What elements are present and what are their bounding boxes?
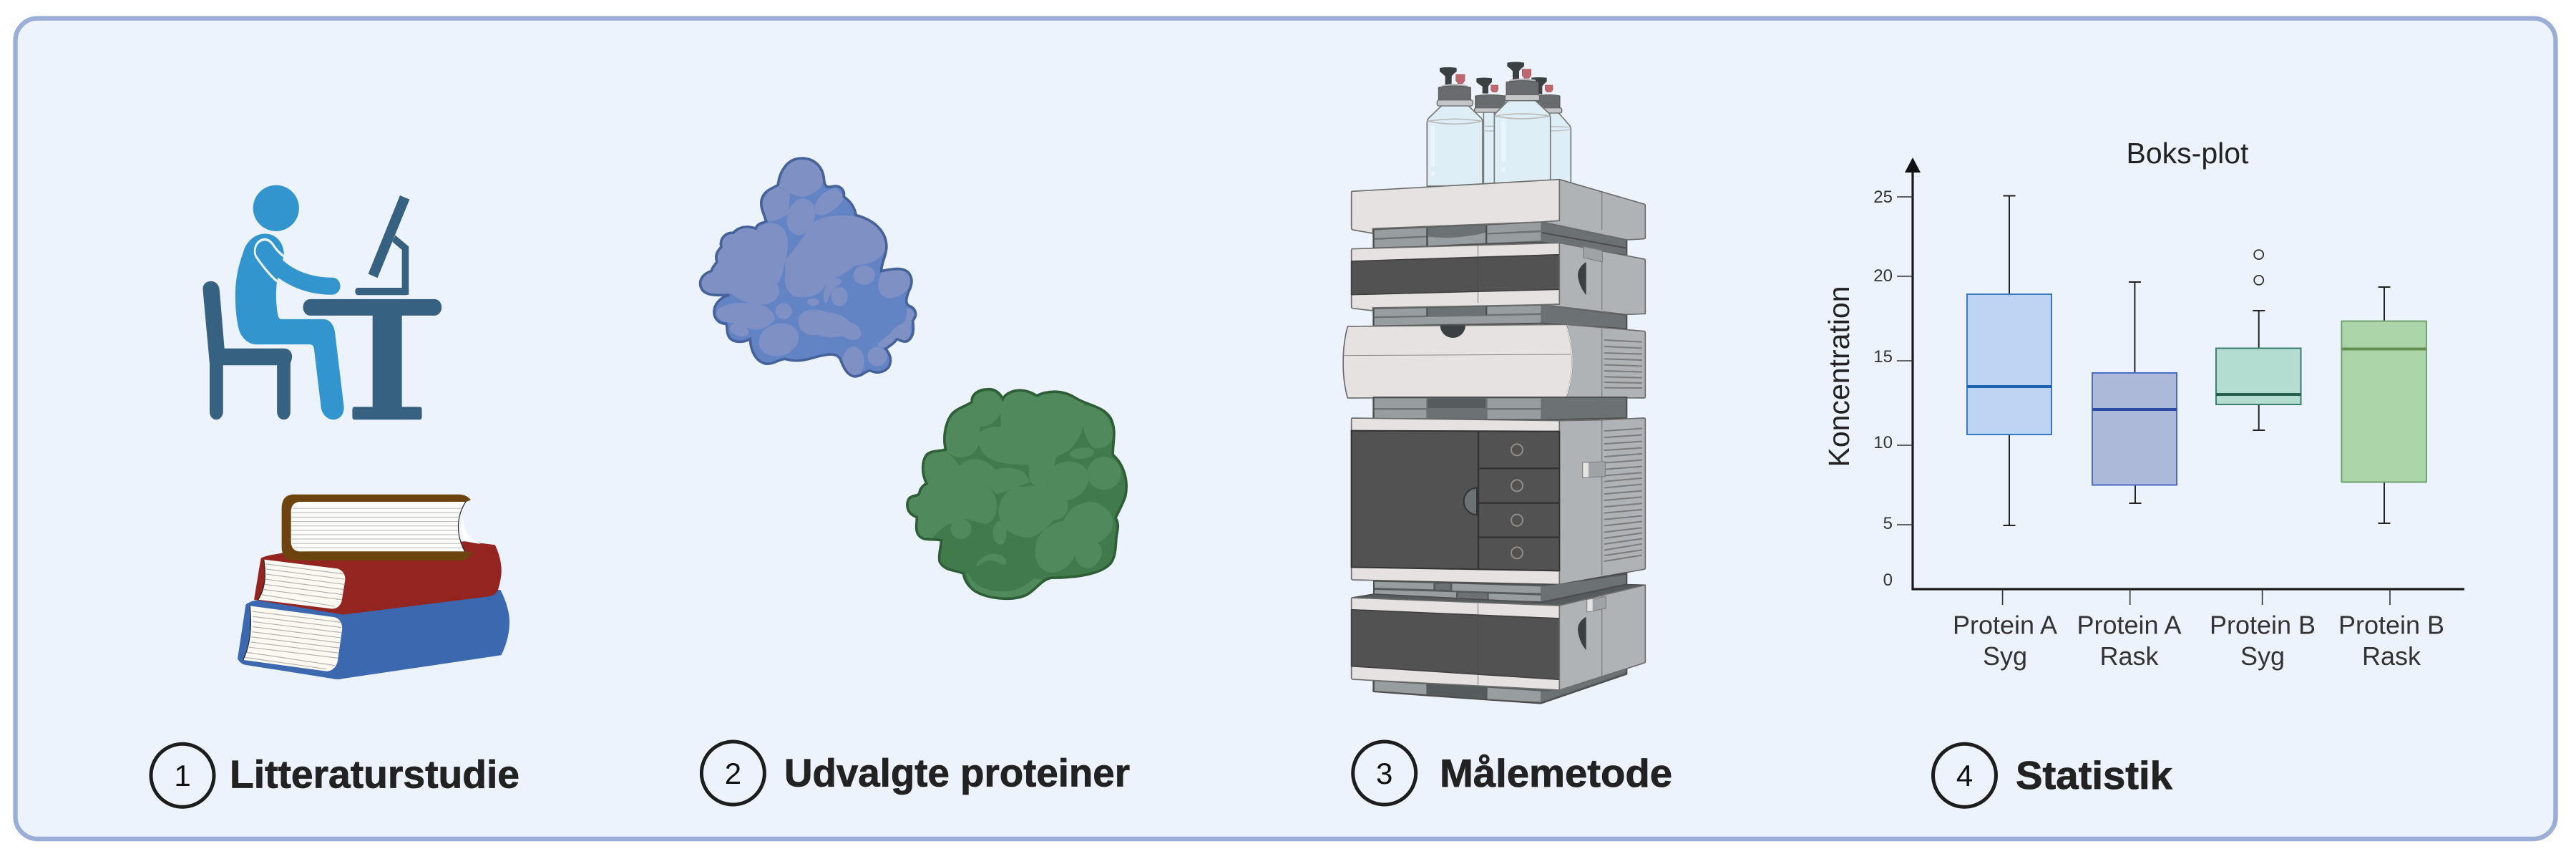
y tick labels: 5	[1883, 514, 1893, 533]
section 2: selected proteins	[701, 158, 1130, 805]
x category labels: Protein A	[1953, 610, 2057, 640]
front bottle right	[1494, 62, 1551, 183]
module 4	[1352, 418, 1645, 585]
back bottle right	[1531, 77, 1571, 183]
band 4	[1374, 573, 1626, 603]
y tick labels: 0	[1883, 571, 1893, 590]
heading: 4 Statistik: 4	[1956, 759, 1973, 792]
icon: HPLC instrument stack	[1343, 180, 1645, 398]
x category labels: Rask	[2362, 641, 2421, 671]
x category labels: Syg	[2240, 641, 2285, 671]
heading: 2 Udvalgte proteiner: 2	[725, 757, 741, 790]
band 3	[1373, 397, 1626, 420]
heading: 3 Målemetode: 3	[1376, 757, 1392, 790]
icon: green protein	[907, 389, 1126, 598]
heading: 2 Udvalgte proteiner: Udvalgte proteiner	[784, 750, 1130, 795]
y tick labels: 15	[1873, 347, 1893, 367]
heading: 3 Målemetode	[1353, 742, 1672, 805]
section 1: literature study illustration	[151, 185, 519, 807]
solvent tray	[1352, 180, 1645, 256]
y tick labels: 20	[1873, 266, 1893, 286]
box plot chart	[1823, 137, 2464, 671]
section 3: measuring method	[1343, 62, 1672, 805]
heading: 1 Litteraturstudie: Litteraturstudie	[230, 752, 519, 796]
icon: blue protein	[701, 158, 916, 377]
box: Protein B Syg	[2216, 250, 2301, 430]
x category labels: Protein B	[2338, 610, 2444, 640]
box: Protein A Rask	[2092, 282, 2177, 503]
back bottle left	[1475, 77, 1506, 184]
x category labels: Syg	[1983, 641, 2027, 671]
y tick labels	[1873, 188, 1893, 590]
heading: 4 Statistik: Statistik	[2016, 753, 2172, 797]
heading: 1 Litteraturstudie	[151, 744, 519, 807]
x category labels: Protein B	[2210, 610, 2316, 640]
icon: person at computer	[203, 185, 441, 419]
y axis label: Koncentration	[1823, 286, 1855, 467]
heading: 3 Målemetode: Målemetode	[1440, 751, 1672, 795]
axes	[1897, 157, 2464, 605]
heading: 2 Udvalgte proteiner	[701, 742, 1130, 805]
icon: solvent bottles	[1427, 62, 1571, 186]
chart title: Boks-plot	[2127, 137, 2249, 170]
x category labels	[1953, 610, 2444, 671]
section 4: statistics	[1823, 137, 2464, 807]
icon: HPLC lower modules	[1352, 397, 1645, 704]
box: Protein B Rask	[2341, 287, 2426, 523]
heading: 4 Statistik	[1933, 744, 2172, 807]
band 5	[1373, 669, 1626, 704]
front bottle left	[1427, 67, 1483, 186]
icon: stack of books	[238, 495, 509, 679]
module 3	[1343, 324, 1645, 398]
module 5	[1352, 585, 1645, 690]
module 2	[1352, 243, 1645, 329]
box: Protein A Syg	[1967, 196, 2051, 525]
y tick labels: 10	[1873, 433, 1893, 452]
heading: 1 Litteraturstudie: 1	[174, 759, 191, 792]
y tick labels: 25	[1873, 188, 1893, 207]
x category labels: Rask	[2099, 641, 2160, 671]
x category labels: Protein A	[2077, 610, 2182, 640]
